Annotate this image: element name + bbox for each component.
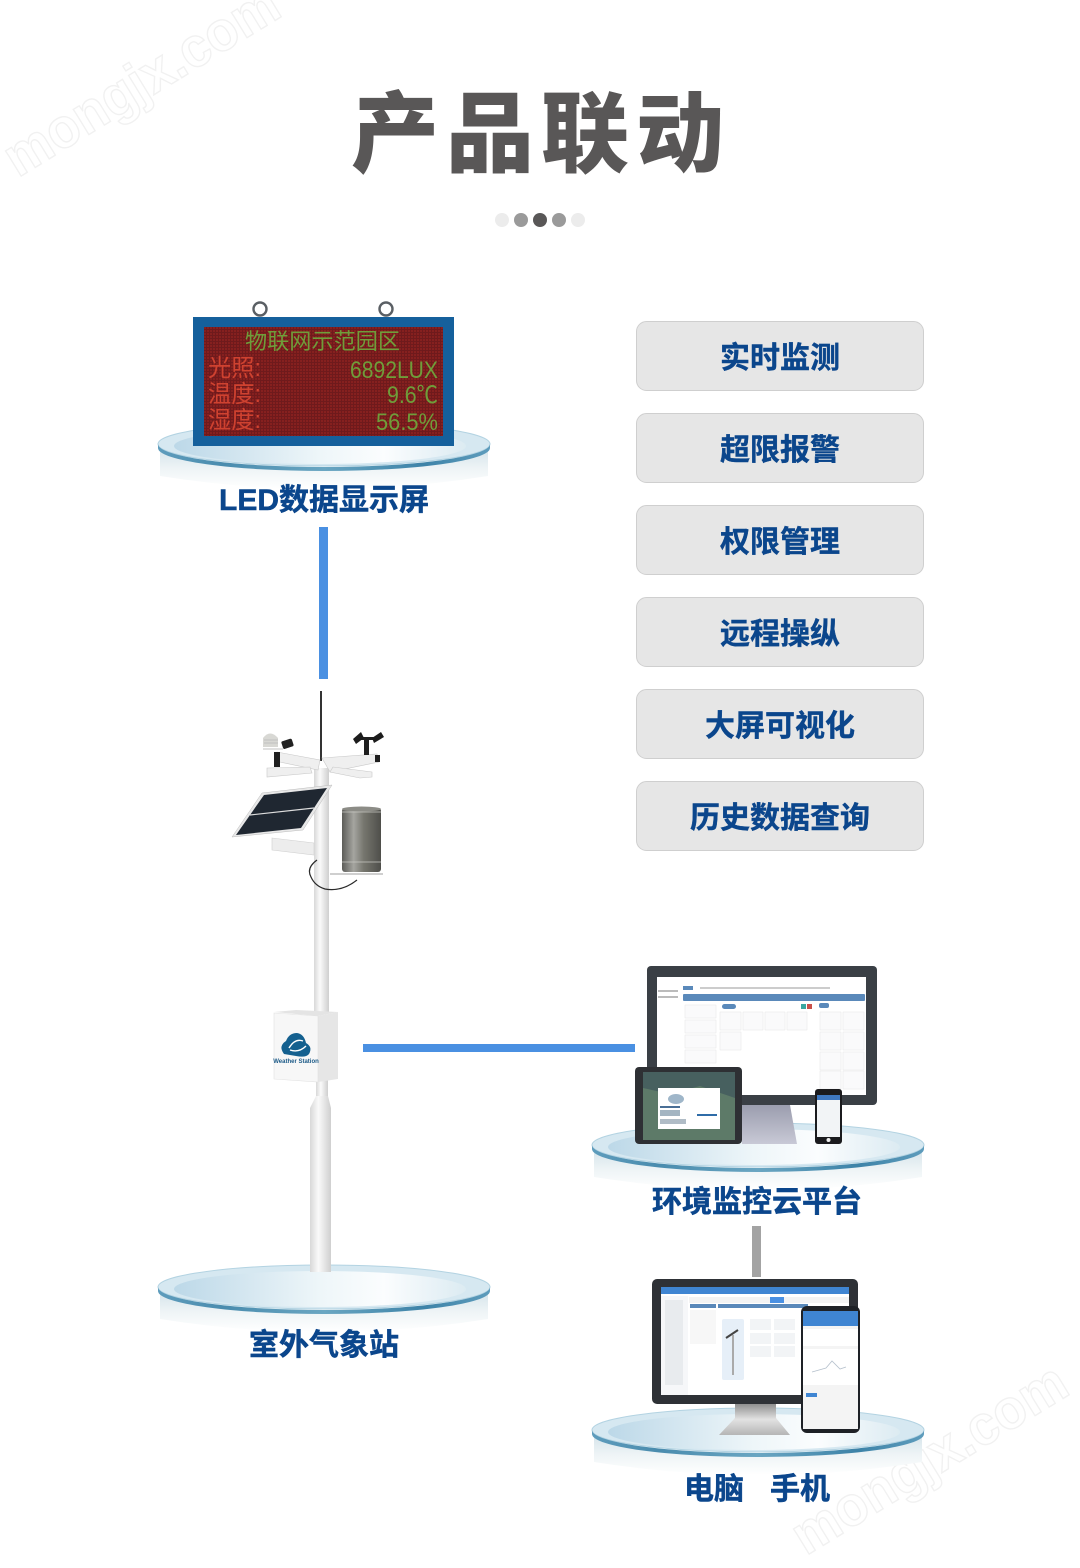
connector: cloud to PC (752, 1226, 761, 1277)
title dots (495, 213, 585, 227)
label: LED: LED数据显示屏 (219, 484, 429, 517)
title: 产品联动 (351, 85, 731, 184)
control box: Weather Station (273, 1059, 319, 1065)
LED display icon: 9.6℃ (387, 382, 438, 409)
temperature sensor (263, 734, 294, 750)
control box (273, 1010, 338, 1082)
button: over-limit alarm (636, 414, 924, 482)
label: PC and phone: 电脑 (684, 1473, 744, 1506)
PC and phone devices (652, 1279, 860, 1435)
platform: LED (158, 422, 490, 489)
pole (314, 768, 329, 1013)
button: permission management (636, 506, 924, 574)
weather station (232, 691, 384, 1272)
PC phone (801, 1306, 860, 1433)
button: realtime monitoring (636, 322, 924, 390)
button: remote control: 远程操纵 (720, 618, 840, 651)
panel bracket (272, 838, 314, 855)
cross arm (267, 752, 379, 778)
monitor stand (742, 1105, 797, 1144)
label: PC and phone: 手机 (770, 1473, 830, 1506)
platform: station (158, 1265, 490, 1332)
LED display icon: 物联网示范园区 (245, 329, 400, 354)
cloud platform devices (635, 966, 877, 1144)
connector: station to cloud (363, 1044, 635, 1052)
logo (281, 1033, 310, 1057)
cable (309, 860, 357, 890)
function buttons (636, 322, 924, 850)
button: over-limit alarm: 超限报警 (720, 434, 840, 467)
antenna (320, 691, 322, 761)
LED display icon: 温度: (208, 381, 261, 408)
button: remote control (636, 598, 924, 666)
LED display icon (193, 302, 454, 446)
connector: LED to station (319, 527, 328, 679)
PC monitor (652, 1279, 858, 1404)
monitor (647, 966, 877, 1105)
button: big screen (636, 690, 924, 758)
label: cloud: 环境监控云平台 (652, 1185, 862, 1219)
button: permission management: 权限管理 (720, 526, 840, 559)
button: history query: 历史数据查询 (690, 802, 870, 835)
LED display icon: 光照: (208, 355, 261, 382)
PC stand (719, 1404, 790, 1435)
LED display icon: 6892LUX (350, 357, 438, 384)
LED display icon: 湿度: (208, 407, 261, 434)
platform: cloud (592, 1123, 924, 1190)
button: history query (636, 782, 924, 850)
tablet (635, 1067, 742, 1144)
rain gauge (330, 806, 383, 875)
button: realtime monitoring: 实时监测 (720, 342, 840, 375)
solar panel (232, 785, 332, 837)
phone (815, 1089, 842, 1144)
platform: PC (592, 1408, 924, 1475)
wind sensors (353, 732, 384, 744)
label: station: 室外气象站 (249, 1329, 399, 1362)
LED display icon: 56.5% (376, 409, 438, 436)
button: big screen: 大屏可视化 (705, 710, 855, 743)
